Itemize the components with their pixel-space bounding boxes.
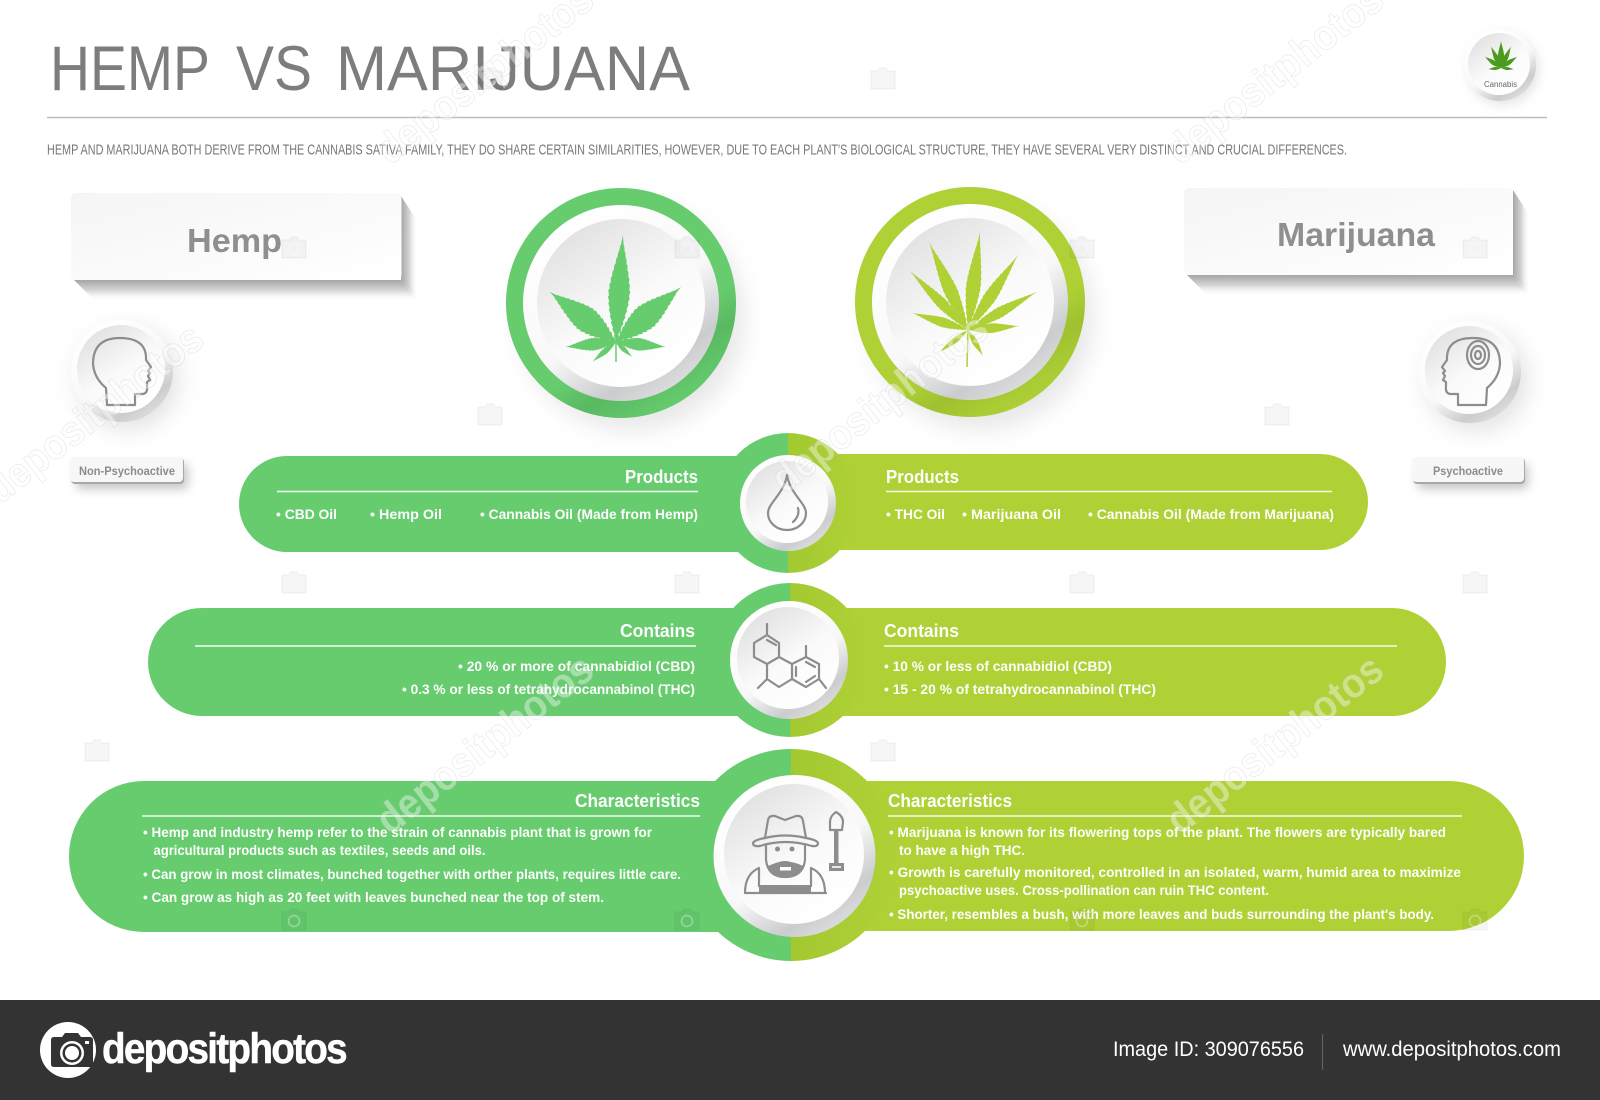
panel: marijuana label box bbox=[1184, 188, 1530, 296]
text: marijuana products: Products bbox=[886, 467, 959, 487]
text: hemp contains: • 0.3 % or less of tetrahydrocannabinol (THC) bbox=[402, 681, 695, 697]
text: marijuana characteristics: psychoactive uses. Cross-pollination can ruin THC content. bbox=[899, 882, 1269, 898]
panel: hemp label box: Hemp bbox=[187, 222, 282, 259]
icon: cannabis logo badge bbox=[1464, 29, 1539, 105]
panel: marijuana label box: Marijuana bbox=[1277, 216, 1436, 253]
panel: hemp label box bbox=[71, 193, 418, 301]
label: psychoactive: Psychoactive bbox=[1433, 464, 1503, 478]
leaf: hemp bbox=[542, 235, 689, 364]
band: marijuana contains bbox=[842, 608, 1446, 716]
icon: hemp leaf medallion bbox=[506, 188, 744, 430]
band: hemp products bbox=[239, 456, 738, 552]
text: hemp characteristics: • Can grow as high as 20 feet with leaves bunched near the top of stem. bbox=[143, 889, 604, 905]
text: hemp products: • CBD Oil bbox=[276, 506, 337, 522]
text: hemp characteristics: • Can grow in most climates, bunched together with orther plants, requires little care. bbox=[143, 866, 681, 882]
text: marijuana products: • THC Oil bbox=[886, 506, 945, 522]
node: contains connector bbox=[730, 583, 848, 737]
title: HEMP bbox=[50, 34, 210, 104]
band: hemp characteristics bbox=[69, 781, 718, 932]
icon: psychoactive head badge bbox=[1419, 321, 1527, 430]
website: www.depositphotos.com bbox=[1342, 1038, 1561, 1061]
text: marijuana characteristics: • Marijuana is known for its flowering tops of the plant. The flowers are typically bared bbox=[889, 824, 1446, 840]
text: hemp products: • Cannabis Oil (Made from Hemp) bbox=[480, 506, 698, 522]
panel: characteristics row bbox=[69, 749, 1524, 961]
label: psychoactive bbox=[1412, 457, 1528, 489]
node: products connector bbox=[736, 433, 840, 573]
text: hemp contains: Contains bbox=[620, 621, 695, 641]
title: VS bbox=[236, 34, 312, 104]
text: marijuana contains: Contains bbox=[884, 621, 959, 641]
text: marijuana products bbox=[886, 467, 1334, 522]
text: hemp characteristics: Characteristics bbox=[575, 791, 700, 811]
watermark pattern bbox=[0, 0, 1487, 930]
text: marijuana characteristics: • Growth is carefully monitored, controlled in an isolated, warm, humid area to maximize bbox=[889, 864, 1461, 880]
icon: non-psychoactive head badge bbox=[71, 320, 178, 429]
title: MARIJUANA bbox=[336, 34, 690, 104]
panel: products row bbox=[239, 433, 1368, 573]
title bbox=[50, 34, 690, 104]
text: hemp characteristics: agricultural products such as textiles, seeds and oils. bbox=[154, 842, 486, 858]
text: hemp contains: • 20 % or more of cannabidiol (CBD) bbox=[458, 658, 695, 674]
band: marijuana products bbox=[780, 454, 1368, 550]
panel: contains row bbox=[148, 583, 1446, 737]
text: hemp products: • Hemp Oil bbox=[370, 506, 442, 522]
label: non-psychoactive: Non-Psychoactive bbox=[79, 464, 175, 478]
image id: Image ID: 309076556 bbox=[1113, 1038, 1304, 1061]
band: hemp contains bbox=[148, 608, 738, 716]
watermark pattern: depositphotos bbox=[367, 645, 602, 843]
text: hemp characteristics: • Hemp and industry hemp refer to the strain of cannabis plant that is grown for bbox=[143, 824, 653, 840]
text: hemp characteristics bbox=[142, 791, 700, 905]
text: marijuana contains: • 10 % or less of cannabidiol (CBD) bbox=[884, 658, 1112, 674]
text: hemp products: Products bbox=[625, 467, 698, 487]
brand name: depositphotos bbox=[102, 1024, 348, 1072]
text: marijuana characteristics: • Shorter, resembles a bush, with more leaves and buds surrounding the plant's body. bbox=[889, 906, 1434, 922]
watermark pattern: depositphotos bbox=[1157, 645, 1392, 843]
leaf: marijuana bbox=[906, 231, 1040, 367]
text: marijuana products: • Cannabis Oil (Made from Marijuana) bbox=[1088, 506, 1334, 522]
text: marijuana characteristics: Characteristics bbox=[888, 791, 1012, 811]
node: characteristics connector bbox=[714, 749, 876, 961]
text: marijuana characteristics: to have a high THC. bbox=[899, 842, 1025, 858]
text: marijuana products: • Marijuana Oil bbox=[962, 506, 1061, 522]
footer bar bbox=[0, 1000, 1600, 1100]
label: non-psychoactive bbox=[70, 457, 188, 489]
watermark pattern: depositphotos bbox=[762, 304, 997, 502]
text: hemp contains bbox=[195, 621, 696, 697]
band: marijuana characteristics bbox=[865, 781, 1524, 931]
text: marijuana contains: • 15 - 20 % of tetrahydrocannabinol (THC) bbox=[884, 681, 1156, 697]
icon: farmer bbox=[745, 812, 844, 893]
text: hemp products bbox=[276, 467, 698, 522]
icon: marijuana leaf medallion bbox=[855, 187, 1093, 429]
text: marijuana contains bbox=[884, 621, 1397, 697]
icon: cannabis logo badge: Cannabis bbox=[1484, 79, 1517, 89]
text: marijuana characteristics bbox=[888, 791, 1462, 922]
icon: depositphotos logo bbox=[40, 1022, 96, 1078]
